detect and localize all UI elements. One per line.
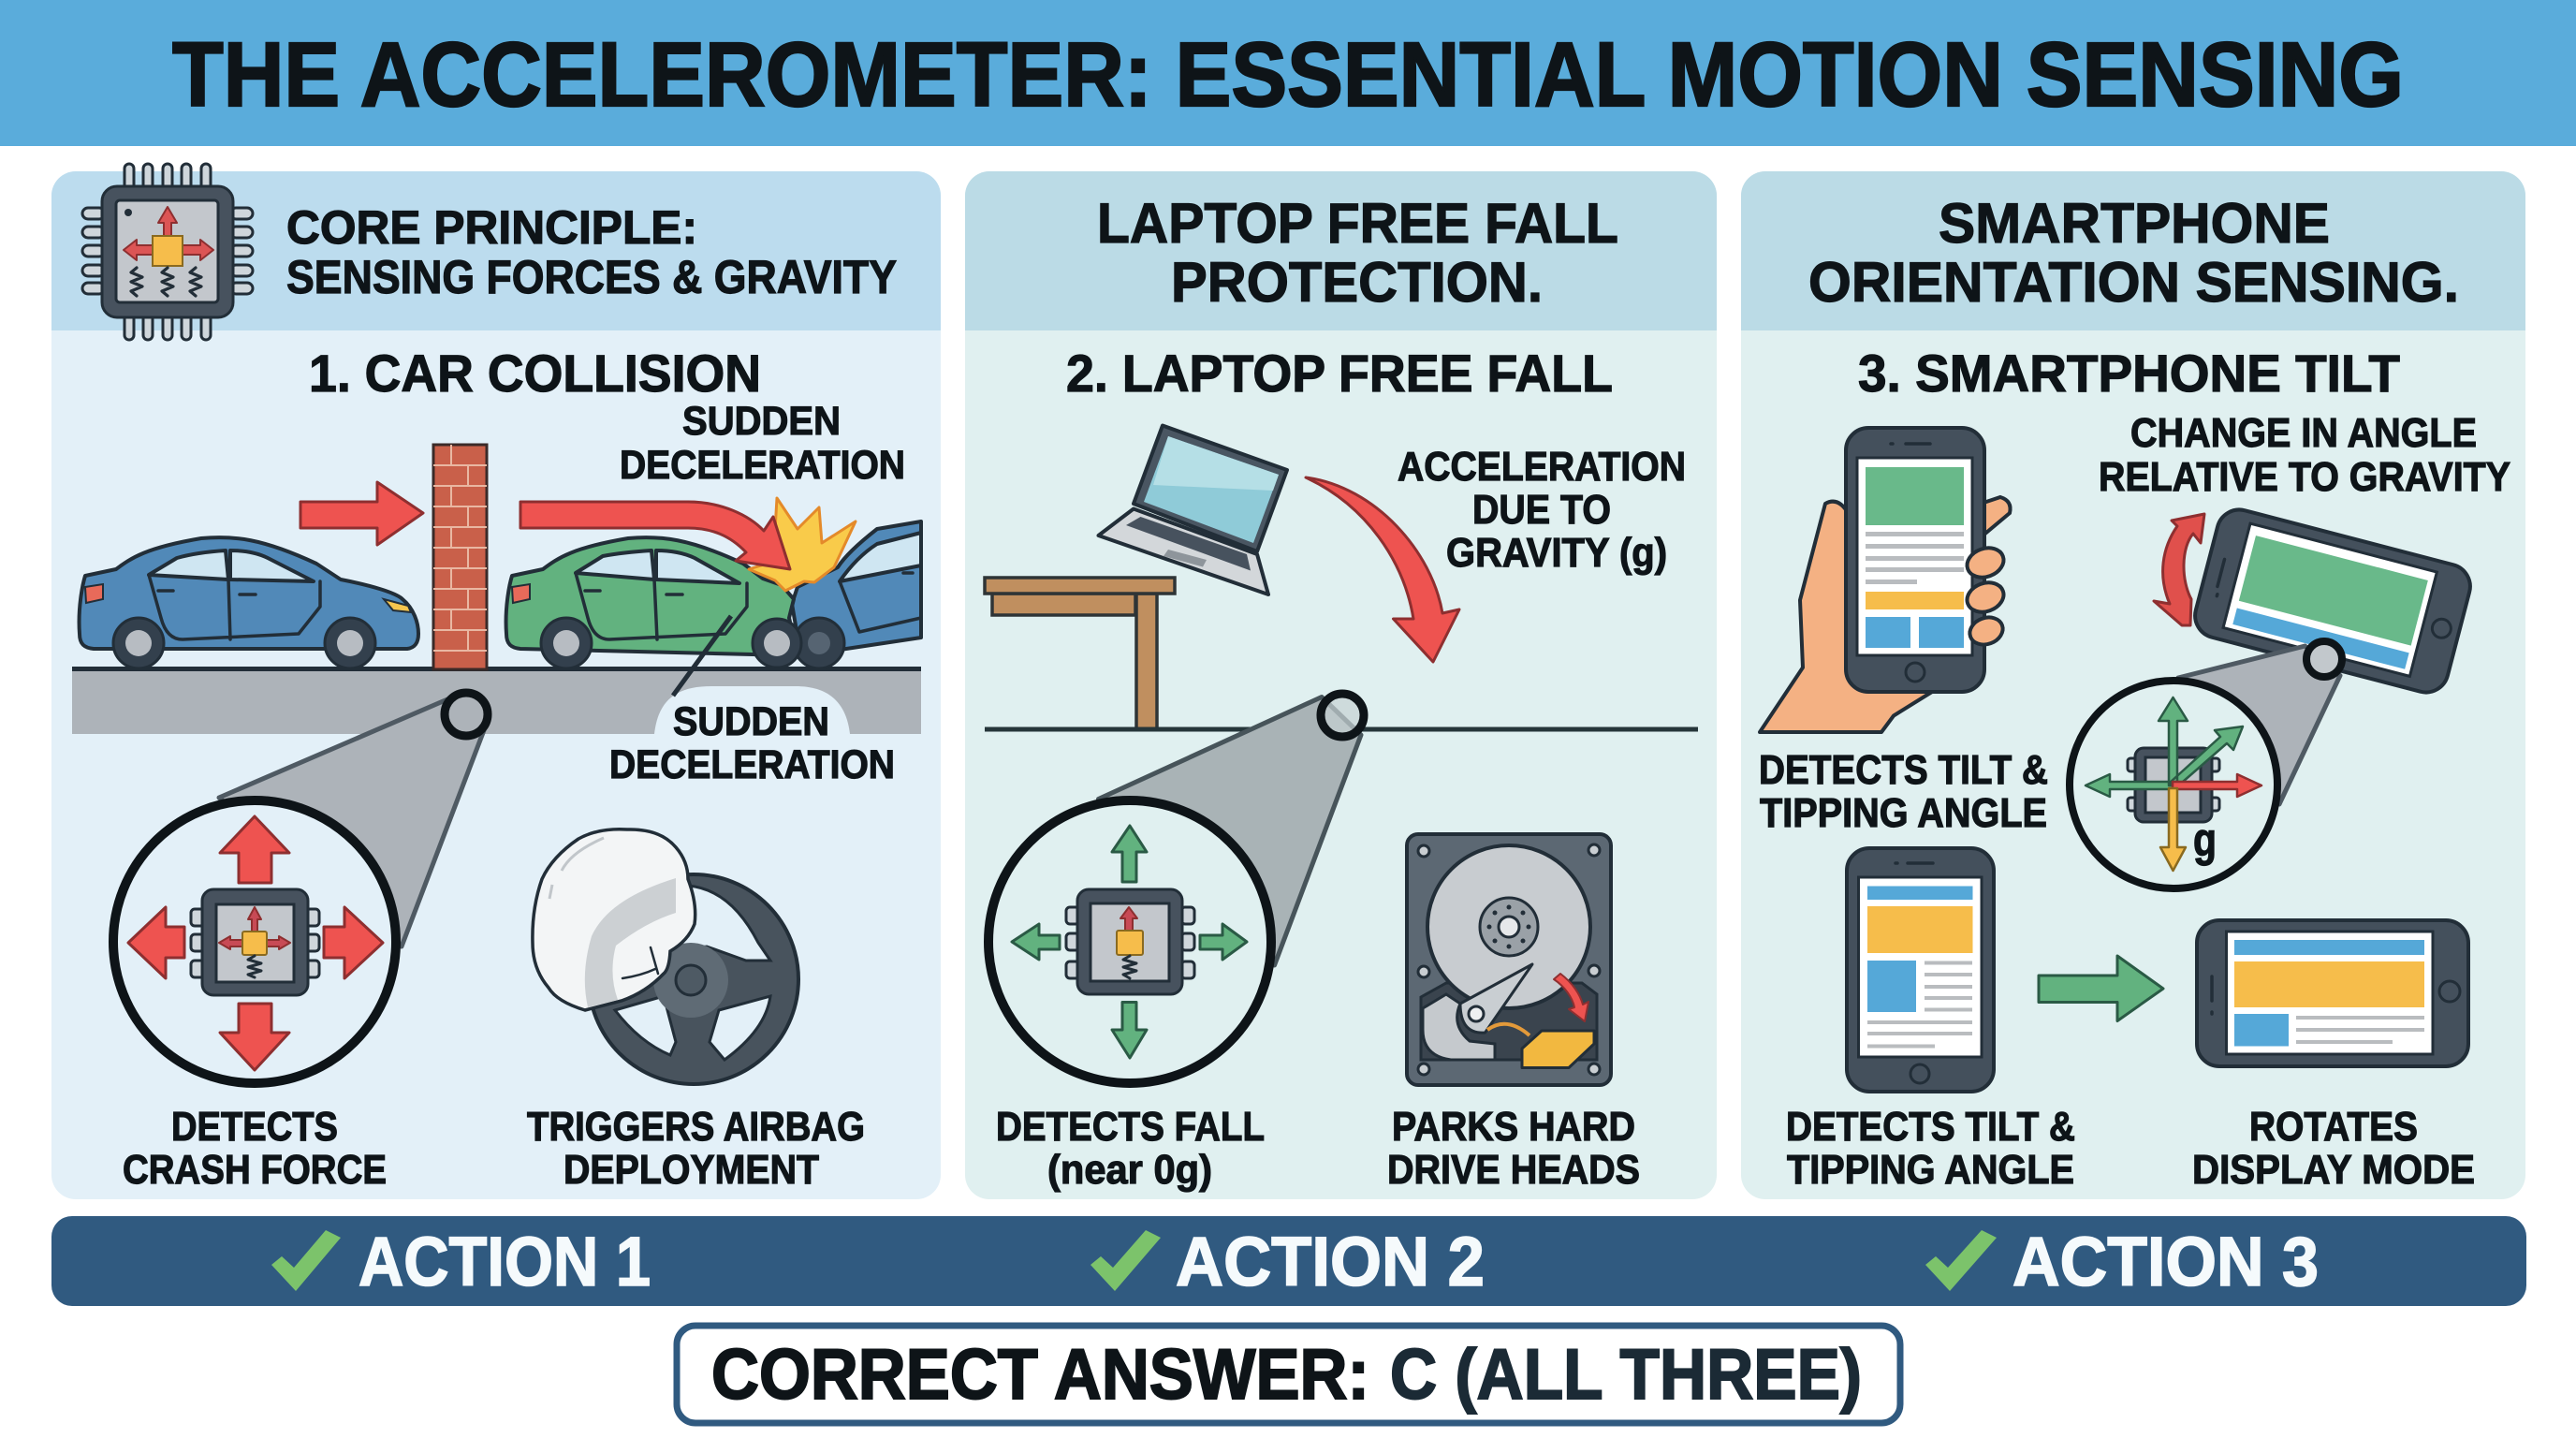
road xyxy=(72,667,921,734)
icon: tilted phone xyxy=(2190,505,2475,697)
label: acceleration due to gravity xyxy=(1398,444,1686,576)
label: acceleration due to gravity: ACCELERATION xyxy=(1398,444,1686,490)
label: acceleration due to gravity: GRAVITY (g) xyxy=(1446,530,1667,576)
magnified sensor: crash force xyxy=(113,800,396,1083)
zoom cone xyxy=(1099,694,1364,965)
caption: detects tilt lower: DETECTS TILT & xyxy=(1786,1104,2075,1150)
panel: laptop free fall xyxy=(965,171,1717,1199)
panel heading: PROTECTION. xyxy=(1171,251,1543,314)
label: sudden deceleration top: SUDDEN xyxy=(682,399,841,444)
icon: falling laptop xyxy=(1099,425,1287,594)
brick wall xyxy=(433,445,487,669)
caption: detects fall xyxy=(996,1104,1265,1193)
action 3: ACTION 3 xyxy=(2012,1223,2319,1300)
arrow: car moving to wall xyxy=(300,482,423,545)
caption: detects crash force: CRASH FORCE xyxy=(123,1147,387,1193)
caption: triggers airbag deployment: TRIGGERS AIRBAG xyxy=(527,1104,865,1150)
icon: hard drive xyxy=(1407,834,1611,1085)
correct answer box: CORRECT ANSWER: xyxy=(711,1335,1369,1415)
caption: parks hard drive heads: DRIVE HEADS xyxy=(1387,1147,1640,1193)
label: sudden deceleration top xyxy=(620,399,905,488)
car: blue second car xyxy=(792,521,921,668)
panel heading: SMARTPHONE xyxy=(1939,192,2330,255)
icon: landscape phone xyxy=(2197,920,2468,1066)
label: acceleration due to gravity: DUE TO xyxy=(1472,487,1611,533)
panel heading: CORE PRINCIPLE: xyxy=(286,201,697,254)
arrow: gravity fall xyxy=(1306,477,1459,662)
caption: detects fall: DETECTS FALL xyxy=(996,1104,1265,1150)
caption: parks hard drive heads xyxy=(1387,1104,1640,1193)
label: change in angle: RELATIVE TO GRAVITY xyxy=(2099,454,2510,500)
panel: car collision xyxy=(51,164,941,1199)
caption: detects tilt lower: TIPPING ANGLE xyxy=(1787,1147,2074,1193)
magnified sensor: free fall xyxy=(988,800,1271,1083)
label: sudden deceleration lower with leader: SUDDEN xyxy=(673,699,829,744)
action 2: ACTION 2 xyxy=(1176,1223,1485,1300)
header banner xyxy=(0,0,2576,146)
icon: steering wheel with airbag xyxy=(533,829,798,1084)
label: sudden deceleration lower with leader: DECELERATION xyxy=(609,742,895,787)
zoom cone xyxy=(2178,641,2342,804)
icon: crash explosion xyxy=(749,498,856,591)
panel heading xyxy=(1808,192,2459,314)
caption: detects tilt lower xyxy=(1786,1104,2075,1193)
panel heading: LAPTOP FREE FALL xyxy=(1097,192,1618,255)
caption: detects crash force xyxy=(123,1104,387,1193)
section title: smartphone tilt: 3. SMARTPHONE TILT xyxy=(1858,344,2400,403)
magnified sensor: axes xyxy=(2070,681,2277,888)
zoom cone xyxy=(219,693,488,946)
caption: detects tilt upper: TIPPING ANGLE xyxy=(1760,790,2047,836)
label: sudden deceleration top: DECELERATION xyxy=(620,443,905,488)
caption: rotates display mode xyxy=(2192,1104,2475,1193)
label: change in angle: CHANGE IN ANGLE xyxy=(2130,410,2477,456)
caption: detects tilt upper xyxy=(1759,747,2048,836)
caption: rotates display mode: DISPLAY MODE xyxy=(2192,1147,2475,1193)
arrow: tilt double arrow xyxy=(2154,514,2204,625)
action 1: ACTION 1 xyxy=(359,1223,651,1300)
label: change in angle xyxy=(2099,410,2510,500)
section title: car collision: 1. CAR COLLISION xyxy=(309,344,761,403)
caption: triggers airbag deployment xyxy=(527,1104,865,1193)
caption: parks hard drive heads: PARKS HARD xyxy=(1392,1104,1635,1150)
car: blue before collision xyxy=(80,537,418,668)
icon: portrait phone xyxy=(1847,848,1994,1092)
caption: triggers airbag deployment: DEPLOYMENT xyxy=(564,1147,819,1193)
label: sudden deceleration lower with leader xyxy=(609,616,895,787)
panel: smartphone orientation xyxy=(1741,171,2525,1199)
panel heading xyxy=(286,201,897,303)
icon: accelerometer chip xyxy=(82,164,253,340)
title: THE ACCELEROMETER: ESSENTIAL MOTION SENSING xyxy=(172,23,2404,125)
table xyxy=(985,578,1175,729)
arrow: sudden deceleration curve xyxy=(520,502,790,569)
panel heading: SENSING FORCES & GRAVITY xyxy=(286,251,897,303)
floor line xyxy=(985,726,1698,732)
label: g: g xyxy=(2193,814,2217,866)
action bar xyxy=(51,1216,2526,1306)
section title: laptop free fall: 2. LAPTOP FREE FALL xyxy=(1066,344,1613,403)
arrow: rotate to landscape xyxy=(2039,956,2163,1020)
car: green crashed xyxy=(506,537,801,668)
correct answer box xyxy=(677,1326,1900,1423)
caption: detects fall: (near 0g) xyxy=(1047,1147,1212,1193)
panel heading xyxy=(1097,192,1618,314)
caption: detects crash force: DETECTS xyxy=(171,1104,338,1150)
correct answer box: C (ALL THREE) xyxy=(1390,1335,1862,1415)
icon: hand holding phone xyxy=(1760,428,2011,732)
caption: rotates display mode: ROTATES xyxy=(2249,1104,2418,1150)
caption: detects tilt upper: DETECTS TILT & xyxy=(1759,747,2048,793)
panel heading: ORIENTATION SENSING. xyxy=(1808,251,2459,314)
